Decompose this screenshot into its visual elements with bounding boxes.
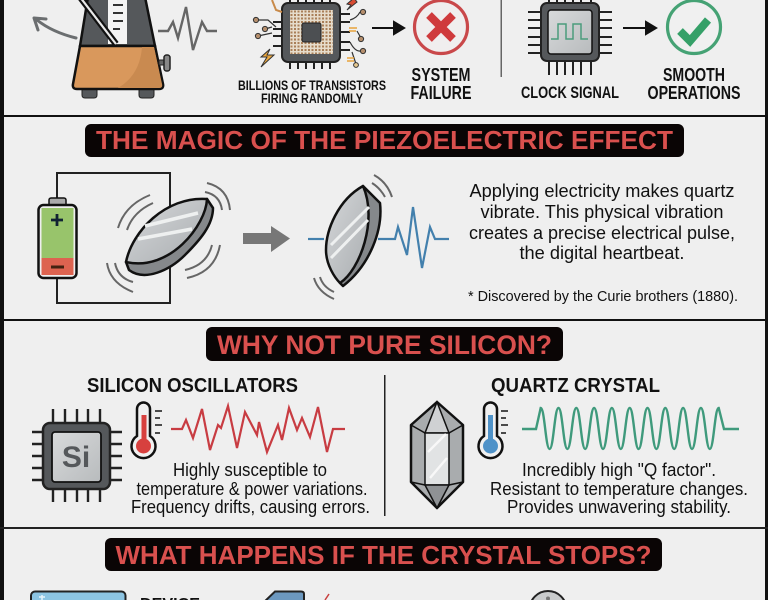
icon: clock chip — [528, 0, 612, 75]
heading: silicon oscillators: SILICON OSCILLATORS — [87, 375, 298, 397]
caption: clock signal: CLOCK SIGNAL — [521, 83, 619, 102]
text: piezo explanation: the digital heartbeat. — [520, 243, 684, 263]
chart: metronome beat wave — [158, 7, 217, 50]
text: piezo explanation: Applying electricity makes quartz — [470, 181, 734, 201]
heading: piezoelectric: THE MAGIC OF THE PIEZOELECTRIC EFFECT — [96, 125, 673, 155]
arrow: chaos to failure — [372, 22, 404, 34]
icon: metronome — [73, 0, 170, 98]
caption: system failure — [410, 65, 472, 103]
arrow: clock to smooth — [623, 22, 656, 34]
text: piezo explanation: vibrate. This physical vibration — [480, 202, 724, 222]
text: silicon description: temperature & power variations. — [136, 479, 368, 499]
text: silicon description — [131, 460, 370, 517]
heading: crystal stops: WHAT HAPPENS IF THE CRYSTAL STOPS? — [116, 540, 652, 570]
icon: chaotic processor — [253, 0, 366, 69]
text: silicon description: Highly susceptible to — [173, 460, 327, 480]
icon: vibrating quartz disc — [107, 183, 230, 292]
icon: red failure cross — [414, 0, 468, 54]
text: quartz description: Incredibly high "Q factor". — [522, 460, 716, 480]
text: piezo explanation — [469, 181, 735, 263]
icon: green check — [668, 0, 720, 54]
text: quartz description — [490, 460, 748, 517]
icon: red lightning crack — [325, 594, 329, 600]
caption: system failure: SYSTEM — [412, 65, 470, 85]
icon: frozen device screen — [31, 592, 126, 600]
chart: input pulse wave — [308, 238, 324, 240]
heading: quartz crystal: QUARTZ CRYSTAL — [491, 375, 660, 397]
icon: gray stopped dial — [530, 591, 566, 600]
icon: quartz disc side — [314, 175, 392, 299]
heading: why not silicon: WHY NOT PURE SILICON? — [217, 330, 552, 360]
icon: corrupted file — [262, 592, 304, 600]
arrow: metronome swing — [34, 18, 76, 38]
caption: smooth operations — [648, 65, 740, 103]
text: piezo explanation: creates a precise electrical pulse, — [469, 223, 735, 243]
text: quartz description: Provides unwavering stability. — [507, 497, 731, 517]
chart: stable quartz sine wave — [522, 408, 739, 449]
arrow: effect direction — [243, 226, 290, 252]
icon: hot thermometer — [132, 403, 162, 458]
icon: quartz crystal — [411, 402, 463, 508]
icon: silicon chip — [32, 409, 122, 502]
caption: transistors — [238, 77, 386, 106]
chart: output pulse wave — [378, 207, 449, 268]
icon: battery — [38, 198, 76, 278]
caption: smooth operations: SMOOTH — [663, 65, 725, 85]
diagram: circuit wire — [57, 173, 170, 303]
caption: system failure: FAILURE — [410, 83, 472, 103]
icon: silicon chip: Si — [62, 441, 90, 474]
caption: transistors: BILLIONS OF TRANSISTORS — [238, 77, 386, 93]
text: silicon description: Frequency drifts, causing errors. — [131, 497, 370, 517]
caption: transistors: FIRING RANDOMLY — [261, 90, 364, 106]
chart: noisy silicon signal — [171, 406, 345, 452]
text: quartz description: Resistant to temperature changes. — [490, 479, 748, 499]
footnote: curie brothers: * Discovered by the Curie brothers (1880). — [468, 288, 738, 305]
caption: smooth operations: OPERATIONS — [648, 83, 740, 103]
icon: cool thermometer — [478, 403, 508, 458]
